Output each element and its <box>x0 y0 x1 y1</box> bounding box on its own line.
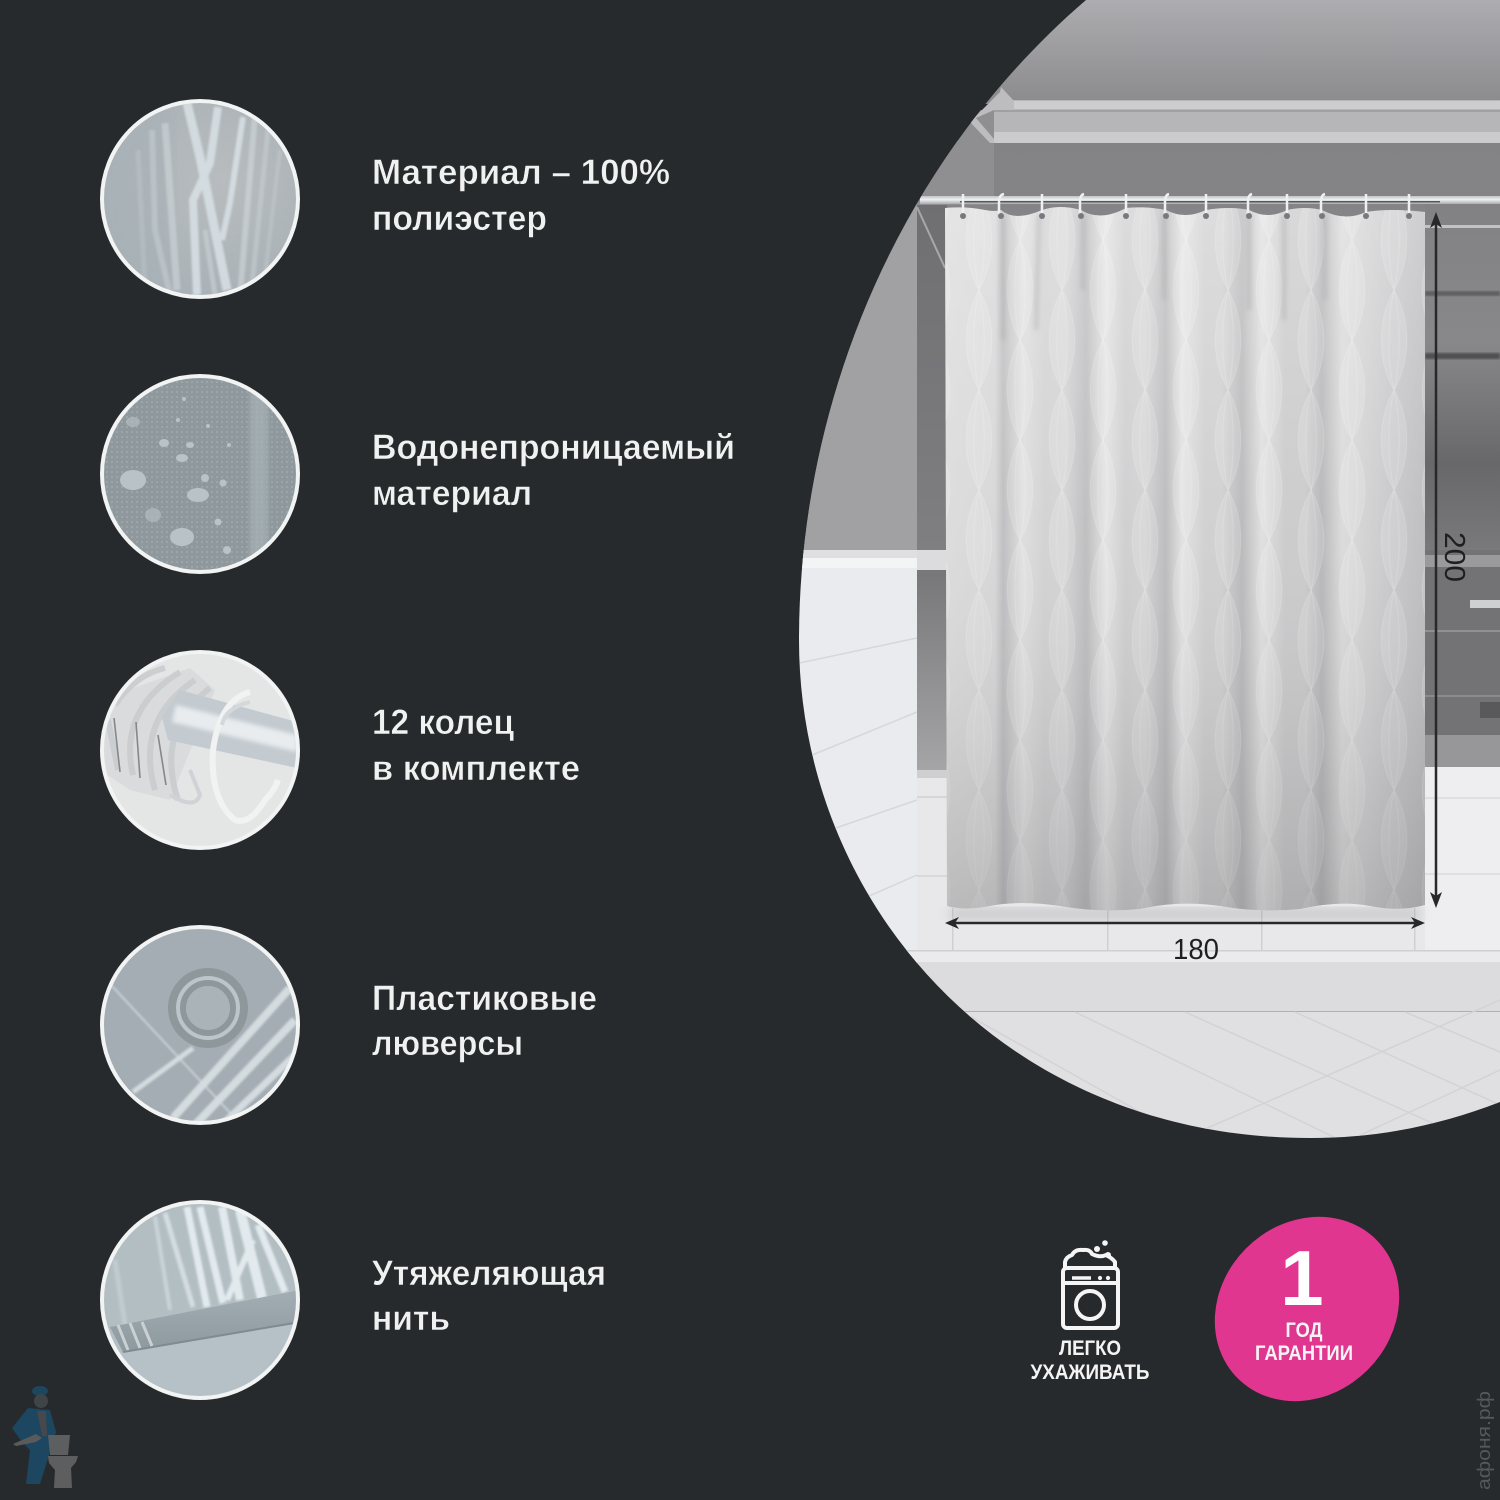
right recess wall <box>1425 204 1500 550</box>
label: нить <box>372 1299 450 1338</box>
label <box>372 153 670 238</box>
curtain shadow <box>950 908 1420 920</box>
label: люверсы <box>372 1024 523 1063</box>
dimension: width <box>945 917 1425 960</box>
photo ring <box>102 1202 298 1398</box>
panel: bathroom photo <box>790 0 1500 1152</box>
left side wall lower <box>803 205 917 555</box>
feature 4: grommets <box>100 925 597 1125</box>
photo: fabric pattern <box>100 100 300 300</box>
label <box>372 979 597 1063</box>
pink blob <box>1177 1179 1437 1439</box>
label: Утяжеляющая <box>372 1254 606 1293</box>
label <box>372 703 580 788</box>
left strip below cap <box>917 550 947 778</box>
dimension: width: 180 <box>1173 934 1219 966</box>
badge: easy care <box>1030 1240 1150 1384</box>
photo ring <box>102 652 298 848</box>
crown moulding <box>970 87 1500 143</box>
watermark: афоня.рф <box>1474 1391 1494 1490</box>
left side wall upper <box>916 110 994 205</box>
left wall tiles <box>799 550 917 963</box>
feature 3: rings <box>100 650 580 850</box>
label: Материал – 100% <box>372 153 670 192</box>
label: Пластиковые <box>372 979 597 1018</box>
dimension: height: 200 <box>1438 532 1470 582</box>
back wall <box>790 140 1500 560</box>
baseboard <box>900 950 1500 1012</box>
label <box>1255 1319 1353 1365</box>
label: ГОД <box>1286 1319 1323 1342</box>
photo: rings on rod <box>100 650 300 850</box>
ceiling <box>986 0 1500 104</box>
curtain rod <box>920 196 1500 204</box>
photo: hem thread <box>100 1200 300 1400</box>
label: Водонепроницаемый <box>372 428 735 467</box>
label: материал <box>372 474 532 513</box>
floor <box>965 1000 1500 1138</box>
label: полиэстер <box>372 199 547 238</box>
grommets <box>960 213 1412 219</box>
dimension: height <box>1430 212 1466 908</box>
number: 1 <box>1280 1234 1324 1322</box>
label <box>1030 1337 1150 1384</box>
feature 2: waterproof <box>100 375 735 575</box>
label: в комплекте <box>372 749 580 788</box>
label <box>372 428 735 513</box>
label: 12 колец <box>372 703 514 742</box>
right wall below cap <box>1425 550 1500 768</box>
feature 5: weighted thread <box>100 1200 606 1400</box>
curtain <box>945 200 1425 920</box>
icon: washing machine <box>1063 1240 1118 1328</box>
left recess strip <box>917 205 947 550</box>
photo ring <box>102 101 298 297</box>
feature 1: material <box>100 100 670 300</box>
label: УХАЖИВАТЬ <box>1030 1361 1150 1384</box>
curtain hooks <box>963 194 1409 214</box>
photo: plastic grommet <box>100 925 300 1125</box>
photo ring <box>102 376 298 572</box>
photo: water drops <box>100 375 300 575</box>
photo ring <box>102 927 298 1123</box>
icon: plumber logo <box>12 1386 78 1488</box>
label: ЛЕГКО <box>1059 1337 1121 1360</box>
label: ГАРАНТИИ <box>1255 1342 1353 1365</box>
label <box>372 1254 606 1338</box>
badge: warranty <box>1177 1179 1437 1439</box>
bath tub <box>917 767 1500 951</box>
